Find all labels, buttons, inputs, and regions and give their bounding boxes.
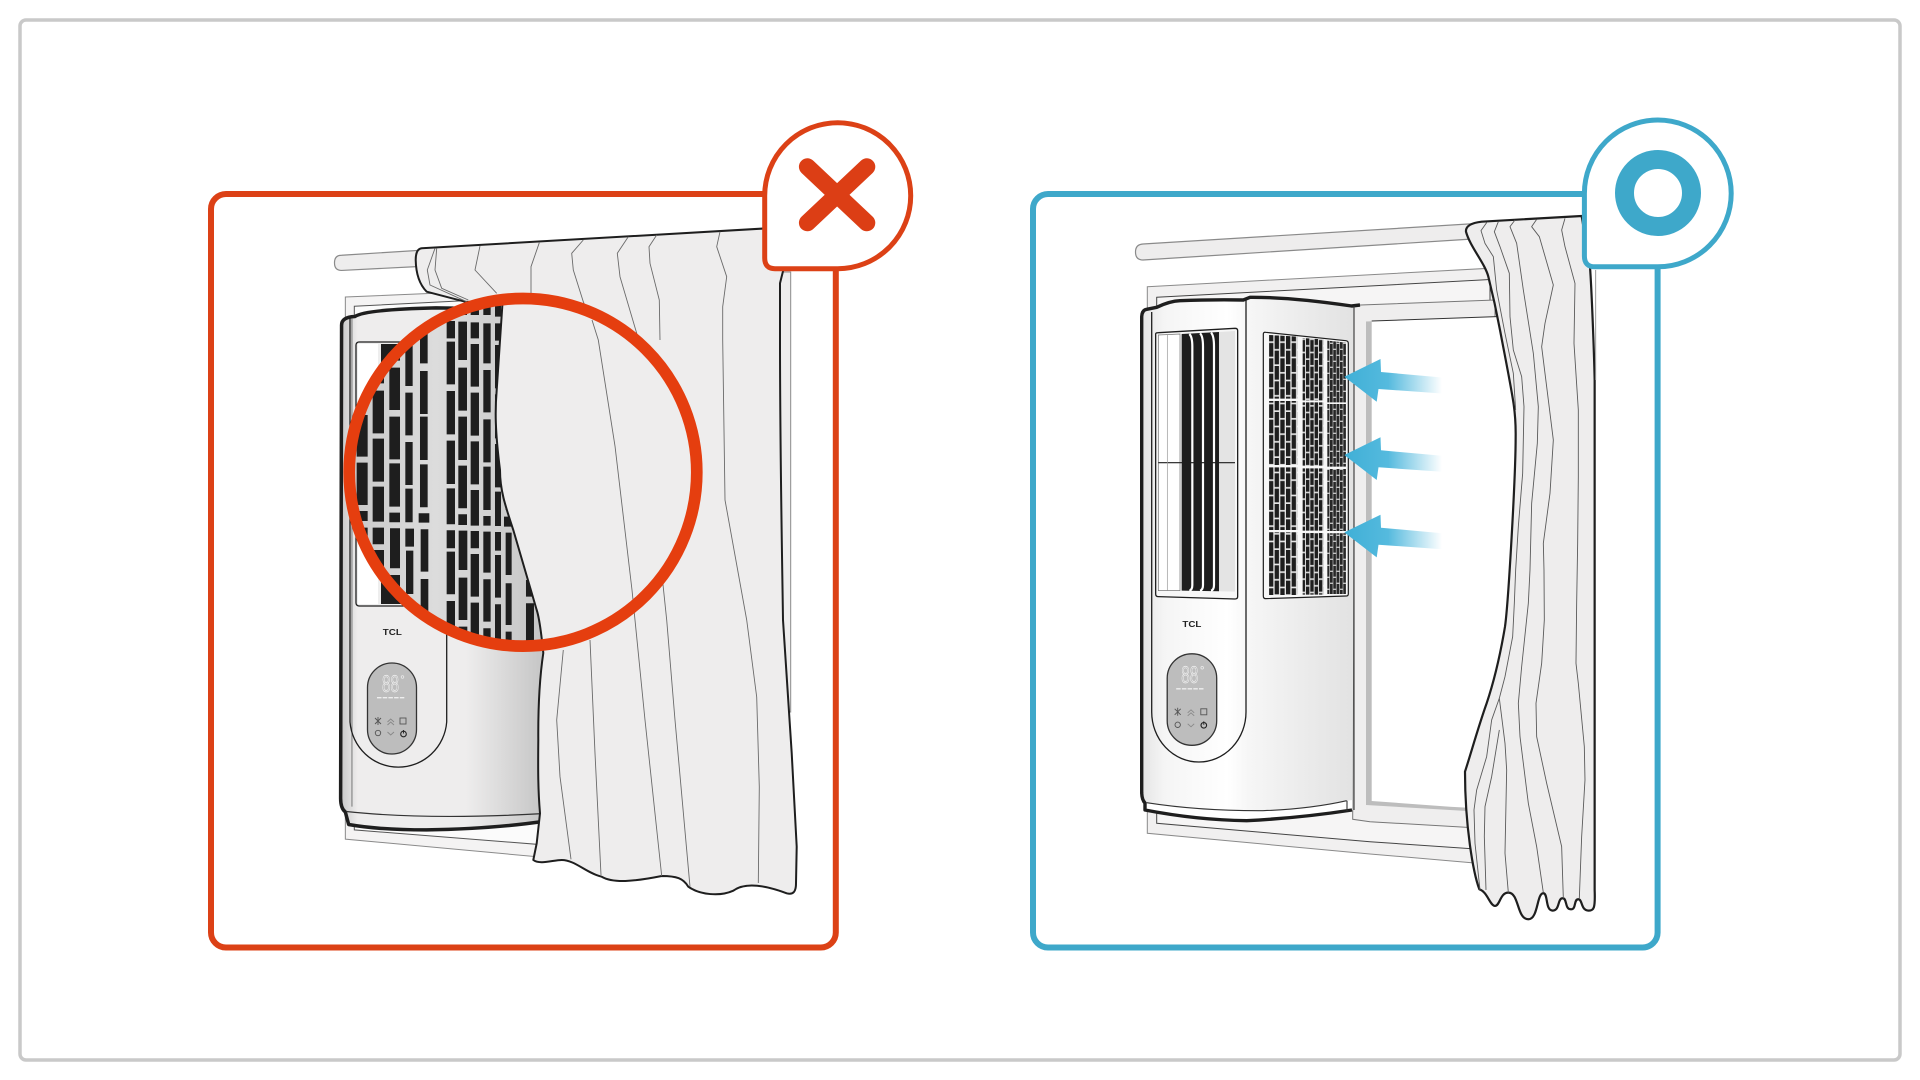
air conditioner unit: incorrect <box>341 308 544 830</box>
front vent with louvers <box>1156 328 1238 599</box>
temperature display: 88 <box>1181 662 1198 689</box>
magnified view of blocked air intake <box>340 290 720 660</box>
arrow: bottom <box>1344 515 1442 557</box>
badge: incorrect <box>765 123 911 269</box>
logo: TCL: TCL <box>1182 619 1201 629</box>
panel border: incorrect <box>211 194 836 948</box>
arrow: top <box>1344 359 1442 402</box>
icon: blue circle <box>1624 160 1692 226</box>
magnified grille <box>355 306 662 640</box>
air conditioner unit: correct <box>1142 297 1360 821</box>
badge: correct <box>1584 120 1731 267</box>
panel: correct placement <box>1033 120 1731 947</box>
curtain: correct, drawn aside <box>1465 216 1596 919</box>
curtain: incorrect, before magnifier <box>416 227 797 894</box>
arrow: middle <box>1344 437 1442 480</box>
curtain rod: correct <box>1136 223 1480 260</box>
front panel outline <box>350 318 447 767</box>
unit body <box>341 308 544 830</box>
control panel <box>1167 654 1217 745</box>
window frame: correct <box>1147 268 1510 864</box>
window frame: incorrect <box>345 272 791 857</box>
panel: incorrect placement <box>211 123 911 947</box>
rear air intake grille <box>1263 332 1348 599</box>
logo: TCL: TCL <box>383 627 402 637</box>
front panel outline <box>1152 298 1246 762</box>
magnified curtain <box>494 304 691 640</box>
airflow arrows <box>1344 359 1442 557</box>
unit body <box>1142 297 1360 821</box>
temperature display: 88 <box>382 671 399 698</box>
curtain rod: incorrect <box>334 250 427 270</box>
panel border: correct <box>1033 194 1658 948</box>
vent <box>356 342 444 606</box>
curtain ring <box>1573 218 1589 234</box>
icon: red cross <box>807 167 867 223</box>
control panel <box>368 663 416 754</box>
magnifier ring <box>349 298 697 646</box>
